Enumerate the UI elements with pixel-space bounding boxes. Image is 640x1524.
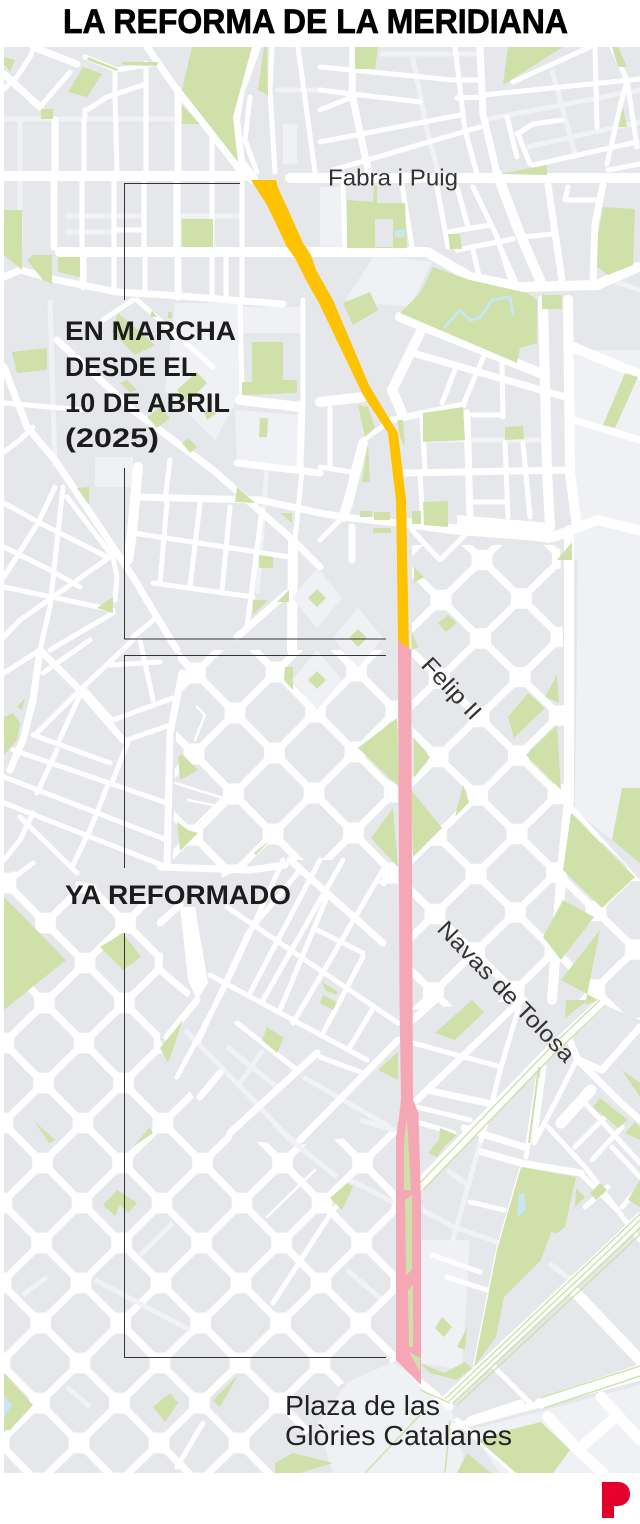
label: Felip II: Felip II (416, 652, 487, 725)
label: Fabra i Puig: Fabra i Puig (328, 164, 458, 190)
route: already reformed section (pink) (396, 640, 421, 1385)
label: ya reformado: YA REFORMADO (65, 880, 291, 910)
label: plaza de las Glories: Glòries Catalanes (285, 1420, 512, 1451)
pale building in park (375, 219, 562, 1258)
label: en marcha: (2025) (65, 423, 159, 453)
route: section under way (yellow) (251, 180, 409, 649)
label: plaza de las Glories: Plaza de las (285, 1390, 440, 1421)
railway corridors (417, 1003, 640, 1403)
title: LA REFORMA DE LA MERIDIANA (63, 3, 568, 41)
leader: section under way (124, 184, 386, 639)
label: en marcha: 10 DE ABRIL (65, 388, 230, 418)
label: en marcha: EN MARCHA (65, 316, 236, 346)
logo (602, 1482, 630, 1518)
leader: reformed section (124, 656, 386, 1358)
lakes (4, 230, 526, 1417)
label: Navas de Tolosa: Navas de Tolosa (432, 915, 580, 1067)
label: en marcha (65, 316, 236, 453)
central median strips (404, 1118, 420, 1372)
garden blocks (292, 568, 383, 710)
label: plaza de las Glories (285, 1390, 512, 1451)
pale areas (95, 124, 640, 1473)
label: en marcha: DESDE EL (65, 352, 197, 382)
